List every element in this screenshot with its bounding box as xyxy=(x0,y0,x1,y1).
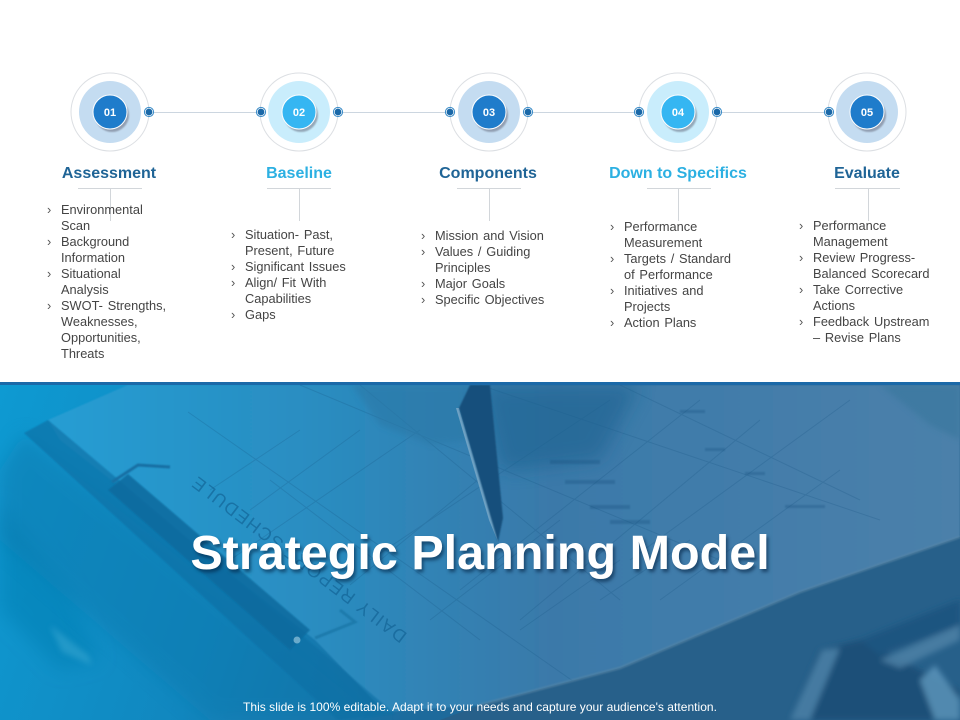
list: Baseline items xyxy=(232,227,346,322)
list: Assessment items: Scan xyxy=(61,218,90,233)
list: Down to Specifics items xyxy=(610,219,731,330)
step 04 circle icon: 04 xyxy=(672,107,685,119)
list: Baseline items: Situation- Past, xyxy=(245,227,333,242)
list: Baseline items: Present, Future xyxy=(245,243,334,258)
heading rules and stems xyxy=(78,188,900,221)
heading: Evaluate: Evaluate xyxy=(834,165,900,182)
list: Assessment items: Threats xyxy=(61,346,104,361)
lower left pen xyxy=(2,542,85,660)
title: Strategic Planning Model xyxy=(190,526,770,580)
step 02 circle icon xyxy=(256,72,344,152)
list: Evaluate items: Take Corrective xyxy=(813,282,903,297)
step 02 circle icon: 02 xyxy=(293,107,305,119)
hand xyxy=(356,386,428,437)
list: Assessment items: Information xyxy=(61,250,125,265)
list: Down to Specifics items: of Performance xyxy=(624,267,713,282)
list: Baseline items: Significant Issues xyxy=(245,259,346,274)
heading: Assessment: Assessment xyxy=(62,165,156,182)
list: Assessment items: Weaknesses, xyxy=(61,314,138,329)
grid lines xyxy=(188,385,880,700)
list: Down to Specifics items: Measurement xyxy=(624,235,702,250)
paper heading print: DAILY REPORT SCHEDULE xyxy=(187,472,410,647)
clipboard clip xyxy=(108,474,310,650)
step 04 circle icon xyxy=(634,72,722,152)
list: Down to Specifics items: Performance xyxy=(624,219,697,234)
list: Components items: Principles xyxy=(435,260,490,275)
list: Assessment items: Opportunities, xyxy=(61,330,141,345)
metal object xyxy=(790,600,960,720)
step 03 circle icon: 03 xyxy=(483,107,495,119)
list: Evaluate items xyxy=(800,218,929,345)
paper xyxy=(48,385,960,712)
heading: Baseline: Baseline xyxy=(266,165,332,182)
heading: Components: Components xyxy=(439,165,537,182)
step 01 circle icon: 01 xyxy=(104,107,116,119)
list: Assessment items: SWOT- Strengths, xyxy=(61,298,166,313)
dark band below clipboard xyxy=(0,439,223,686)
list: Components items xyxy=(422,228,544,307)
heading: Down to Specifics: Down to Specifics xyxy=(609,165,747,182)
list: Baseline items: Capabilities xyxy=(245,291,311,306)
list: Components items: Values / Guiding xyxy=(435,244,530,259)
list: Components items: Specific Objectives xyxy=(435,292,544,307)
list: Components items: Major Goals xyxy=(435,276,505,291)
list: Evaluate items: Feedback Upstream xyxy=(813,314,929,329)
list: Assessment items: Analysis xyxy=(61,282,109,297)
list: Assessment items: Background xyxy=(61,234,129,249)
list: Assessment items xyxy=(48,202,166,361)
photo banner background xyxy=(0,382,960,720)
clipboard xyxy=(24,420,395,720)
step 05 circle icon: 05 xyxy=(861,107,873,119)
pen xyxy=(456,408,498,542)
paper edge and desk xyxy=(440,584,824,720)
list: Assessment items: Environmental xyxy=(61,202,143,217)
list: Down to Specifics items: Projects xyxy=(624,299,670,314)
list: Evaluate items: Management xyxy=(813,234,888,249)
list: Evaluate items: Performance xyxy=(813,218,886,233)
list: Down to Specifics items: Targets / Standard xyxy=(624,251,731,266)
list: Evaluate items: Actions xyxy=(813,298,855,313)
list: Evaluate items: – Revise Plans xyxy=(813,330,901,345)
step 03 circle icon xyxy=(444,72,534,152)
list: Evaluate items: Review Progress- xyxy=(813,250,915,265)
step 01 circle icon xyxy=(70,72,154,152)
list: Down to Specifics items: Initiatives and xyxy=(624,283,703,298)
list: Down to Specifics items: Action Plans xyxy=(624,315,696,330)
list: Components items: Mission and Vision xyxy=(435,228,544,243)
list: Assessment items: Situational xyxy=(61,266,121,281)
table printed marks xyxy=(550,410,825,524)
step 05 circle icon xyxy=(824,72,906,152)
step connector lines xyxy=(154,112,824,113)
list: Evaluate items: Balanced Scorecard xyxy=(813,266,929,281)
list: Baseline items: Gaps xyxy=(245,307,276,322)
footer note: This slide is 100% editable. Adapt it to your needs and capture your audience's attention. xyxy=(243,700,717,714)
list: Baseline items: Align/ Fit With xyxy=(245,275,326,290)
